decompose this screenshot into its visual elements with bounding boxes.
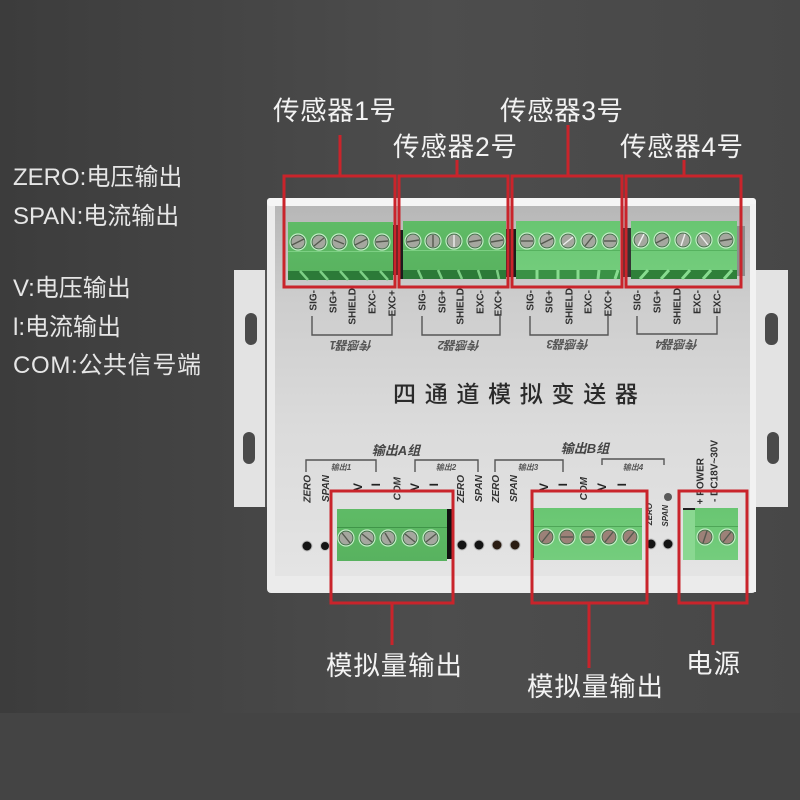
output group A labels: ZERO [456,475,467,504]
terminal block: sensor 2 [399,221,512,279]
terminal block: power [683,508,738,560]
sensor 4 pin labels: SIG+ [652,290,664,313]
label: sensor 2: 传感器2号 [393,132,517,162]
sensor 3 pin labels: EXC+ [604,290,614,316]
legend text: l:电流输出 [13,314,121,341]
output group A labels: 输出A组 [372,443,422,458]
red callout box: sensor 2 [399,160,508,287]
output group B labels: 输出B组 [561,441,611,456]
power labels: - DC18V~30V [710,440,720,502]
output group A labels [302,443,485,504]
output group A labels: V [408,483,422,491]
sensor 3 pin labels: SIG+ [544,290,556,313]
terminal block: sensor 3 [512,221,620,279]
sensor 2 pin labels [418,288,504,352]
sensor 2 pin labels: EXC- [476,290,486,314]
output group B labels: ZERO [491,475,502,504]
legend text: SPAN:电流输出 [13,203,179,230]
legend text: COM:公共信号端 [13,352,201,379]
red callout box: analog output B [532,491,647,668]
label: analog output A: 模拟量输出 [326,651,462,681]
output group A labels: 输出2 [436,463,457,472]
sensor 1 pin labels: EXC+ [388,290,398,316]
legend text: V:电压输出 [13,275,131,302]
sensor 4 pin labels [632,288,724,351]
sensor 1 pin labels: SHIELD [348,288,358,325]
output group B labels: 输出4 [623,463,644,472]
sensor 1 pin labels [308,288,398,352]
output group A labels: COM [392,476,404,500]
sensor 3 pin labels [526,288,614,351]
label: sensor 1: 传感器1号 [273,96,396,126]
legend text [13,164,201,379]
transmitter panel [267,198,756,593]
sensor 2 pin labels: SHIELD [456,288,466,325]
red callout box: power [679,491,747,645]
legend text: ZERO:电压输出 [13,164,182,191]
sensor 1 pin labels: 传感器1 [329,338,372,352]
output group B labels: SPAN [661,505,670,527]
right mounting tab [756,270,788,507]
sensor 3 pin labels: SIG- [526,290,536,311]
output group A labels: I [369,483,383,486]
sensor 2 pin labels: EXC+ [494,290,504,316]
sensor 4 pin labels: SHIELD [672,288,684,325]
output group B labels: ZERO [645,502,654,526]
sensor 3 pin labels: EXC- [584,290,594,314]
indicator holes [302,539,673,551]
output group B labels: I [615,483,629,486]
output group A labels: ZERO [302,475,314,504]
terminal block: sensor 4 [622,221,745,279]
left mounting tab [234,270,268,507]
sensor 4 pin labels: EXC- [712,290,724,314]
terminal block: sensor 1 [288,222,399,280]
output group B labels: V [595,483,609,491]
output group A labels: V [351,483,365,491]
label: sensor 4: 传感器4号 [620,132,743,162]
output group B labels: I [556,483,570,486]
terminal block: output B [532,508,642,560]
red callout box: sensor 4 [626,160,741,287]
terminal block: output A [337,509,452,561]
sensor 2 pin labels: 传感器2 [437,338,480,352]
output group B labels: 输出3 [518,463,539,472]
label: analog output B: 模拟量输出 [527,672,663,702]
output group B labels: COM [579,476,590,500]
sensor 3 pin labels: 传感器3 [546,337,589,351]
indicator LED [664,493,672,501]
red callout box: sensor 1 [284,135,395,287]
red callout box: sensor 3 [512,125,622,287]
output group A labels: SPAN [321,474,332,502]
output group A labels: SPAN [474,474,485,502]
output group A labels: 输出1 [331,463,352,472]
output group B labels: SPAN [509,474,520,502]
power labels [696,440,720,504]
red callout box: analog output A [331,491,453,645]
output group B labels [491,441,670,527]
output group A labels: I [427,483,441,486]
label: sensor 3: 传感器3号 [500,96,623,126]
sensor 3 pin labels: SHIELD [564,288,576,325]
sensor 1 pin labels: SIG+ [328,290,340,313]
sensor 4 pin labels: 传感器4 [655,337,698,351]
sensor 1 pin labels: EXC- [368,290,378,314]
sensor 2 pin labels: SIG- [418,290,428,311]
label: power: 电源 [686,649,740,679]
device title: 四通道模拟变送器 [393,381,647,407]
output group B labels: V [537,483,551,491]
sensor 2 pin labels: SIG+ [438,290,448,313]
power labels: + POWER [696,457,706,504]
sensor 1 pin labels: SIG- [308,290,320,311]
sensor 4 pin labels: EXC- [692,290,704,314]
sensor 4 pin labels: SIG- [632,290,644,311]
